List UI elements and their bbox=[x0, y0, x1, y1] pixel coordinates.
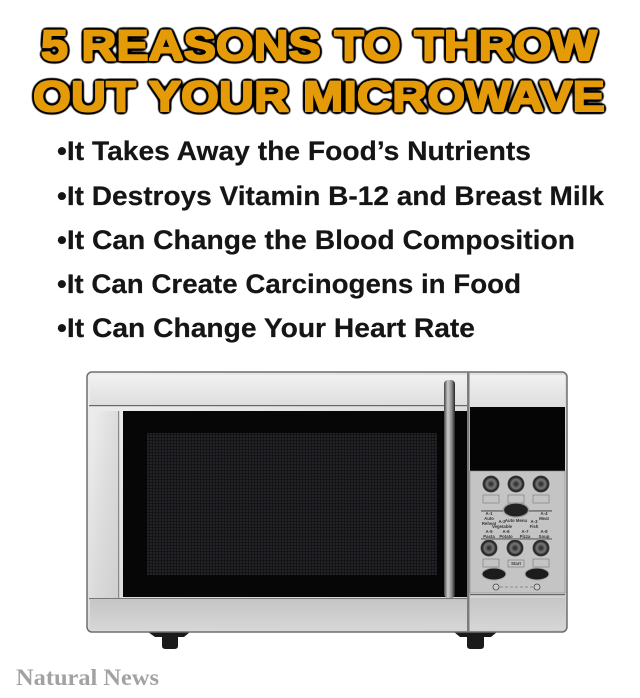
control panel keypad: Soup bbox=[539, 534, 550, 539]
icon: microwave feet bbox=[148, 632, 497, 649]
window mesh bbox=[147, 433, 437, 575]
door bottom band bbox=[90, 600, 467, 630]
door top band bbox=[90, 375, 467, 405]
title: 5 REASONS TO THROW bbox=[41, 22, 597, 70]
control panel keypad: Start bbox=[511, 561, 521, 566]
bullet list of reasons: •It Takes Away the Food’s Nutrients bbox=[57, 136, 531, 166]
door left band bbox=[91, 411, 118, 598]
door and panel divider bbox=[467, 372, 470, 632]
control panel keypad: Auto Menu bbox=[505, 518, 527, 523]
bullet list of reasons: •It Can Change Your Heart Rate bbox=[57, 313, 475, 343]
control panel top band bbox=[470, 375, 565, 407]
door window bbox=[123, 411, 467, 597]
microwave body bbox=[87, 372, 567, 632]
control panel keypad: A-7 bbox=[522, 529, 529, 534]
bullet list of reasons: •It Can Change the Blood Composition bbox=[57, 225, 575, 255]
control panel keypad bbox=[470, 471, 565, 630]
control panel keypad: Potato bbox=[499, 534, 513, 539]
bullet list of reasons: •It Can Create Carcinogens in Food bbox=[57, 269, 521, 299]
control panel keypad: Auto bbox=[484, 516, 494, 521]
title: OUT YOUR MICROWAVE bbox=[33, 73, 605, 121]
title bbox=[33, 22, 605, 121]
control panel keypad: A-6 bbox=[503, 529, 510, 534]
control panel keypad: Reheat bbox=[482, 521, 497, 526]
control panel keypad: A-1 bbox=[486, 511, 493, 516]
control panel keypad: A-3 bbox=[531, 519, 538, 524]
door handle bbox=[444, 380, 455, 598]
control panel keypad: Vegetable bbox=[492, 524, 513, 529]
microwave illustration bbox=[87, 372, 567, 649]
control panel display bbox=[470, 407, 565, 471]
control panel keypad: A-8 bbox=[541, 529, 548, 534]
control panel keypad: Pizza bbox=[520, 534, 531, 539]
control panel keypad: Fish bbox=[530, 524, 539, 529]
bullet list of reasons bbox=[57, 136, 605, 343]
control panel keypad: A-5 bbox=[486, 529, 493, 534]
control panel keypad: A-4 bbox=[541, 511, 548, 516]
source credit: Natural News bbox=[16, 665, 159, 690]
bullet list of reasons: •It Destroys Vitamin B-12 and Breast Milk bbox=[57, 181, 605, 211]
control panel keypad: Meat bbox=[539, 516, 549, 521]
control panel keypad: Pasta bbox=[483, 534, 495, 539]
control panel keypad: A-2 bbox=[499, 519, 506, 524]
